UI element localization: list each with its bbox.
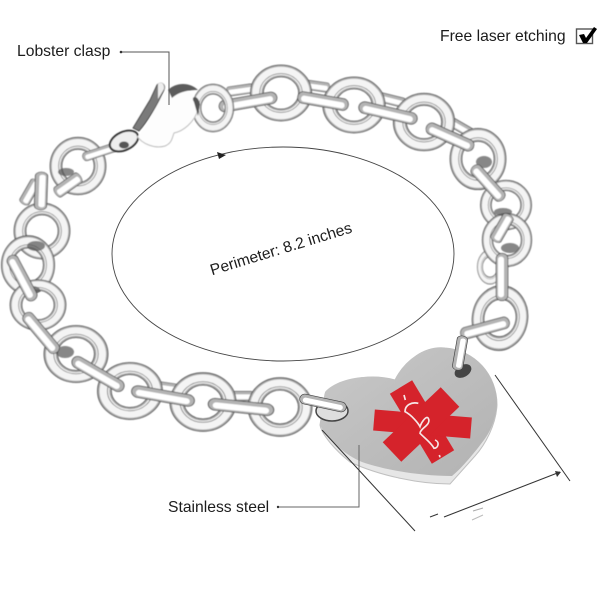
clasp hook xyxy=(168,84,198,98)
callout: stainless steel xyxy=(168,445,359,516)
right pendant hole and link xyxy=(452,361,474,381)
rear strand segments xyxy=(24,84,472,397)
medical star of life xyxy=(374,387,471,457)
callout: lobster clasp xyxy=(17,43,169,105)
clasp arm xyxy=(133,83,164,131)
heart pendant xyxy=(305,340,497,484)
perimeter label: Perimeter: 8.2 inches xyxy=(208,220,354,279)
left pendant hole and link xyxy=(316,401,348,421)
dark shadows between links xyxy=(24,156,519,358)
callout: lobster clasp: Lobster clasp xyxy=(17,43,111,60)
rings xyxy=(7,71,527,430)
callout: free laser etching: Free laser etching xyxy=(440,28,566,45)
icon: check box xyxy=(576,27,597,44)
staff and serpent xyxy=(404,395,440,457)
arrowhead xyxy=(217,152,226,159)
lobster clasp xyxy=(107,83,229,155)
perimeter ellipse with arrow xyxy=(112,147,454,361)
pendant edge xyxy=(320,348,497,484)
chain: bracelet links xyxy=(7,71,527,430)
clasp body xyxy=(137,89,198,147)
pendant dimension lines xyxy=(322,375,570,531)
small clasp link xyxy=(107,127,141,155)
jump ring xyxy=(197,89,229,127)
callout: stainless steel: Stainless steel xyxy=(168,499,269,516)
pendant face xyxy=(320,348,497,476)
front bars xyxy=(12,97,509,411)
